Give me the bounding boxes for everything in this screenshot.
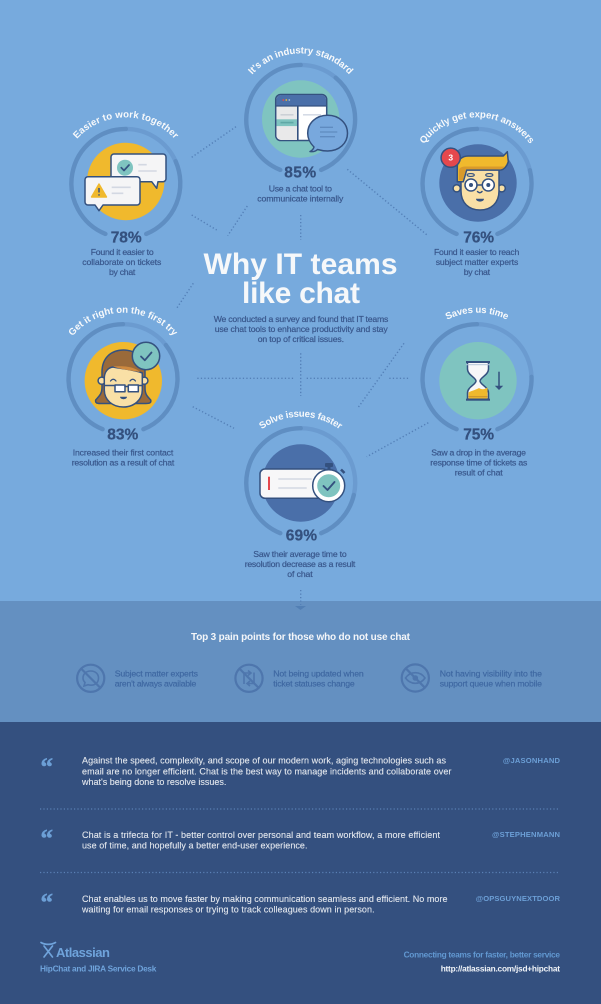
icon: chat bubbles — [85, 143, 166, 220]
stat 69%: 69% — [286, 528, 317, 545]
description — [430, 448, 528, 478]
panel: solve issues faster 69% — [244, 411, 358, 579]
quote 3: Chat enables us to move faster by making communication seamless and efficient. No more — [82, 894, 448, 904]
heading: solve issues faster: Solve issues faster — [259, 411, 342, 428]
text: experts: aren't always available — [115, 679, 196, 689]
arrow down — [295, 590, 306, 610]
stat 78%: 78% — [111, 230, 142, 247]
heading: expert answers: Quickly get expert answers — [420, 112, 534, 144]
title: Why IT teams — [204, 248, 398, 281]
text: experts — [115, 669, 199, 689]
intro text — [214, 314, 389, 344]
text: updates: Not being updated when — [273, 669, 364, 679]
stat 85%: 85% — [284, 165, 316, 182]
icon: no experts — [77, 665, 104, 692]
icon: ticket and stopwatch — [260, 444, 345, 522]
intro text: We conducted a survey and found that IT teams — [214, 314, 389, 324]
quote 2: Chat is a trifecta for IT - better control over personal and team workflow, a more efficient — [82, 830, 440, 840]
quote 3: “ — [40, 890, 53, 916]
description: by chat — [464, 267, 491, 277]
description: subject matter experts — [436, 257, 519, 267]
panel: testimonials — [0, 722, 601, 1004]
progress ring 75% — [423, 324, 532, 429]
description: response time of tickets as — [430, 458, 528, 468]
description: result of chat — [455, 468, 503, 478]
icon: expert face: 3 — [448, 153, 453, 163]
stat 76%: 76% — [463, 230, 494, 247]
title — [204, 248, 398, 310]
description: collaborate on tickets — [82, 257, 162, 267]
quote 1: @JASONHAND — [503, 756, 561, 765]
quote 2: @STEPHENMANN — [492, 830, 560, 839]
description — [72, 448, 175, 468]
panel: saves us time 75% — [420, 308, 534, 478]
title: like chat — [242, 277, 360, 310]
progress ring 83% — [69, 324, 177, 429]
description: resolution decrease as a result — [245, 559, 356, 569]
quote 1: email are no longer efficient. Chat is the best way to manage incidents and collaborate over — [82, 766, 451, 776]
heading: easier to work together: Easier to work together — [72, 111, 178, 138]
description: by chat — [109, 267, 136, 277]
panel: industry standard 85% — [244, 47, 358, 204]
product names: HipChat and JIRA Service Desk — [40, 963, 157, 973]
intro text: on top of critical issues. — [258, 334, 344, 344]
quote 2 — [40, 826, 560, 852]
band background — [0, 601, 601, 722]
description: Saw a drop in the average — [431, 448, 526, 458]
quote 1: “ — [40, 754, 53, 781]
text: visibility: Not having visibility into the — [440, 669, 542, 679]
progress ring 69% — [246, 428, 355, 533]
dotted connector lines — [176, 127, 428, 457]
panel: easier to work together 78% — [69, 111, 182, 277]
tagline: Connecting teams for faster, better service — [404, 950, 560, 960]
heading: first try: Get it right on the first try — [69, 306, 178, 336]
description: of chat — [287, 569, 313, 579]
description: Found it easier to reach — [434, 247, 519, 257]
footer — [40, 942, 560, 973]
panel: quickly get expert answers 76% — [420, 112, 534, 277]
description: communicate internally — [257, 193, 344, 203]
intro text: use chat tools to enhance productivity and stay — [215, 324, 388, 334]
description: resolution as a result of chat — [72, 458, 175, 468]
text: updates — [273, 669, 364, 689]
quote 1 — [40, 754, 561, 787]
heading: saves us time: Saves us time — [446, 308, 508, 319]
panel: get it right on the first try 83% — [66, 306, 180, 468]
heading: industry standard: It's an industry standard — [248, 47, 354, 74]
description: Increased their first contact — [73, 448, 174, 458]
progress ring 76% — [423, 129, 532, 234]
stat 83%: 83% — [107, 426, 139, 443]
quote 3 — [40, 890, 561, 916]
progress ring 85% — [246, 65, 355, 170]
quote 3: @OPSGUYNEXTDOOR — [476, 894, 561, 903]
icon: support agent face — [85, 342, 162, 419]
description — [257, 184, 344, 203]
icon: chat window — [262, 80, 348, 158]
icon: expert face — [439, 144, 517, 222]
icon: no updates — [235, 665, 263, 692]
quote 1: Against the speed, complexity, and scope of our modern work, aging technologies such as — [82, 756, 446, 766]
panel: pain points — [0, 590, 601, 722]
quote 1: what's being done to resolve issues. — [81, 777, 226, 787]
description — [82, 247, 162, 277]
text: visibility — [440, 669, 542, 689]
description: Saw their average time to — [253, 549, 347, 559]
description: Found it easier to — [91, 247, 154, 257]
text: visibility: support queue when mobile — [440, 679, 542, 689]
progress ring 78% — [71, 129, 180, 234]
dark background — [0, 722, 601, 1004]
description: Use a chat tool to — [269, 184, 332, 194]
logo: Atlassian: Atlassian — [56, 945, 110, 960]
url: http://atlassian.com/jsd+hipchat — [441, 963, 560, 973]
heading: pain points: Top 3 pain points for those who do not use chat — [191, 632, 411, 643]
text: experts: Subject matter experts — [115, 669, 199, 679]
description — [434, 247, 519, 277]
icon: no visibility — [402, 664, 429, 692]
icon: hourglass — [439, 342, 517, 419]
text: updates: ticket statuses change — [273, 679, 355, 689]
logo: Atlassian — [41, 942, 110, 960]
quote 3: waiting for email responses or trying to track colleagues down in person. — [81, 904, 375, 914]
quote 2: use of time, and hopefully a better end-user experience. — [82, 841, 308, 851]
description — [245, 549, 356, 579]
stat 75%: 75% — [463, 426, 494, 443]
quote 2: “ — [40, 826, 53, 852]
